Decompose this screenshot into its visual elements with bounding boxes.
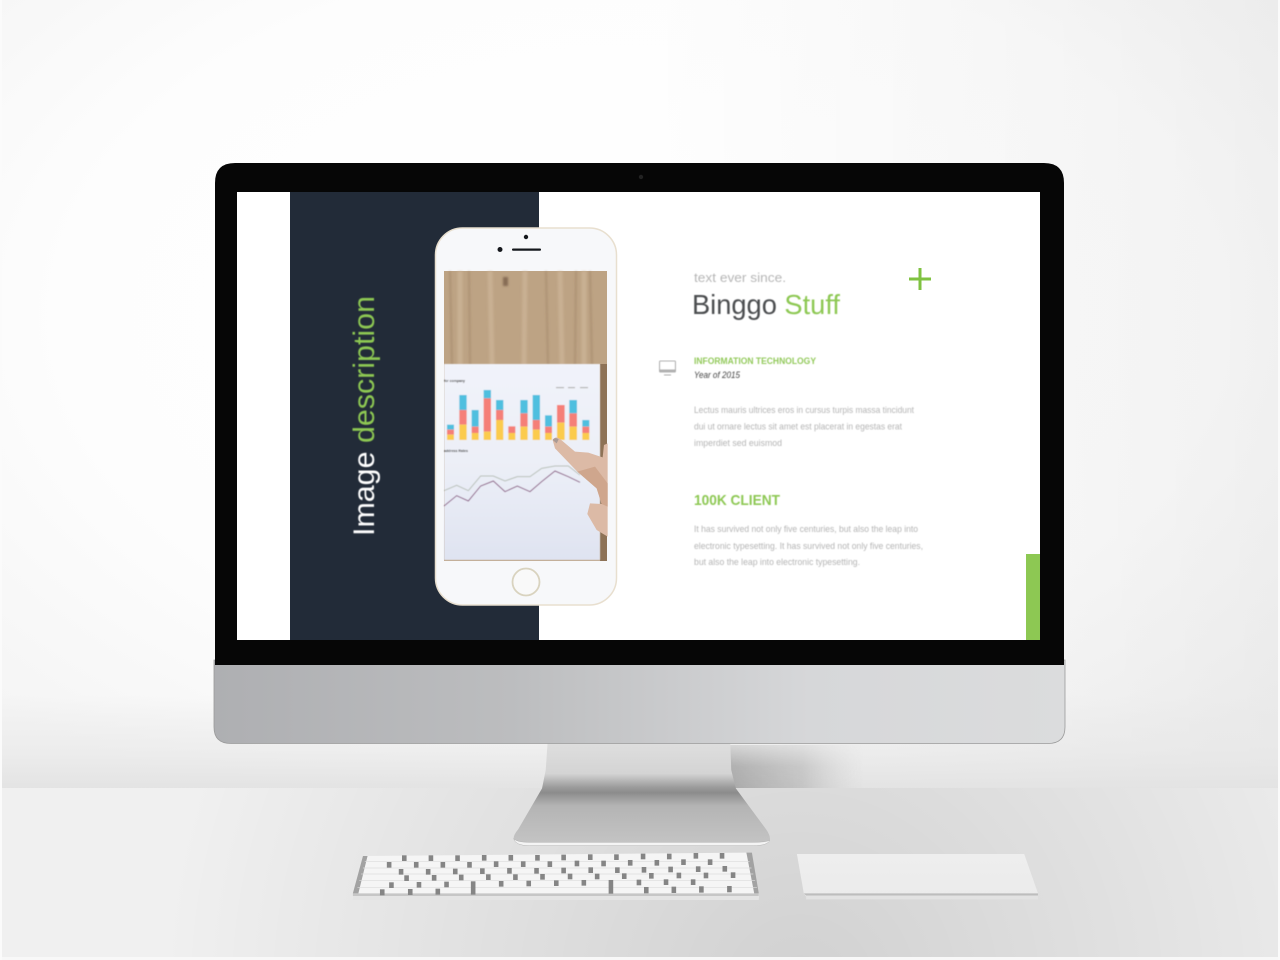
icon: plus sign bbox=[909, 268, 931, 290]
paper sheet bbox=[444, 364, 600, 560]
home button bbox=[512, 568, 540, 596]
stacked bar chart bbox=[447, 390, 589, 440]
hand pointing bbox=[553, 437, 608, 537]
rotated title: Image description bbox=[348, 296, 381, 536]
phone speaker and camera bbox=[498, 235, 541, 252]
section body text bbox=[694, 405, 914, 449]
heading eyebrow: text ever since. bbox=[694, 270, 786, 285]
paper with charts bbox=[444, 364, 600, 560]
trackpad bbox=[797, 854, 1038, 899]
content heading block bbox=[692, 270, 840, 320]
monitor chin bbox=[214, 660, 1065, 744]
bar chart heading: for company bbox=[444, 379, 465, 383]
webcam bbox=[639, 175, 643, 179]
keyboard key gaps bbox=[380, 853, 735, 895]
keyboard bbox=[353, 853, 759, 900]
stat body text: electronic typesetting. It has survived not only five centuries, bbox=[694, 541, 923, 552]
stand shadow on wall bbox=[730, 745, 844, 788]
stat body text: but also the leap into electronic typesetting. bbox=[694, 557, 860, 568]
monitor stand bbox=[514, 743, 770, 846]
phone mockup bbox=[436, 228, 616, 605]
stat body text: It has survived not only five centuries, but also the leap into bbox=[694, 524, 918, 535]
screen bbox=[237, 192, 1040, 640]
section year: Year of 2015 bbox=[694, 370, 741, 380]
section title: INFORMATION TECHNOLOGY bbox=[694, 356, 817, 367]
phone photo: wood desk bbox=[444, 271, 607, 561]
heading: Binggo Stuff bbox=[692, 289, 840, 320]
icon: computer monitor bbox=[660, 361, 676, 375]
stat body text bbox=[694, 524, 923, 568]
section body text: imperdiet sed euismod bbox=[694, 438, 782, 449]
dark side panel bbox=[290, 192, 539, 640]
bar chart legend bbox=[556, 387, 588, 388]
keyboard row lines bbox=[357, 861, 757, 887]
monitor bbox=[214, 163, 1065, 744]
section body text: dui ut ornare lectus sit amet est placerat in egestas erat bbox=[694, 422, 902, 432]
line chart heading: address Rates bbox=[444, 449, 468, 453]
stat heading: 100K CLIENT bbox=[694, 492, 780, 509]
monitor bezel bbox=[215, 163, 1064, 665]
green corner bar bbox=[1026, 554, 1040, 640]
section body text: Lectus mauris ultrices eros in cursus turpis massa tincidunt bbox=[694, 405, 914, 416]
line chart bbox=[444, 466, 580, 506]
section: information technology bbox=[694, 356, 914, 449]
section: 100k client bbox=[694, 492, 923, 568]
phone body bbox=[436, 228, 616, 605]
